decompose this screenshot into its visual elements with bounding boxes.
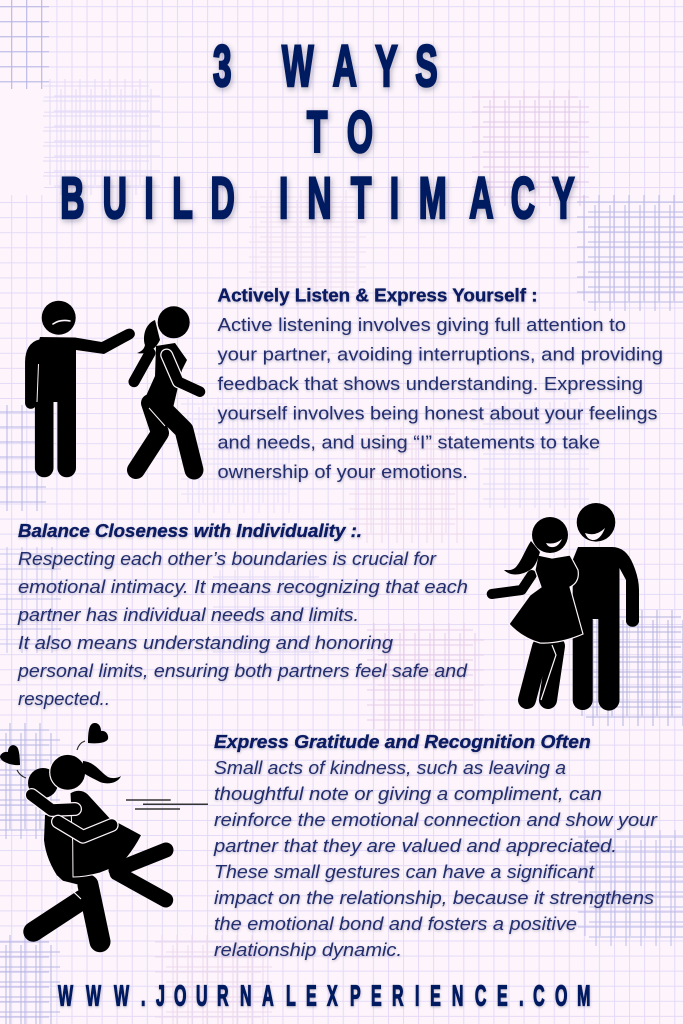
icon: left heart	[0, 745, 20, 765]
text block: balance closeness: emotional intimacy. It means recognizing that each	[18, 576, 468, 597]
footer url: WWW.JOURNALEXPERIENCE.COM	[58, 980, 590, 1012]
text block: actively listen: your partner, avoiding interruptions, and providing	[218, 344, 663, 364]
text block: balance closeness: Balance Closeness with Individuality :.	[18, 520, 362, 541]
title: TO	[307, 101, 373, 165]
text block: express gratitude: partner that they are valued and appreciated.	[213, 835, 617, 856]
text block: actively listen: feedback that shows understanding. Expressing	[218, 373, 643, 394]
text block: express gratitude: Express Gratitude and Recognition Often	[214, 731, 591, 752]
text block: balance closeness: respected..	[18, 688, 110, 709]
text block: express gratitude: reinforce the emotional connection and show your	[214, 809, 658, 830]
text block: balance closeness: partner has individual needs and limits.	[17, 604, 359, 625]
title: 3WAYS	[213, 35, 438, 99]
text block: balance closeness: Respecting each other’s boundaries is crucial for	[18, 548, 437, 569]
text block: express gratitude: the emotional bond and fosters a positive	[214, 913, 577, 934]
title: BUILDINTIMACY	[60, 167, 575, 231]
text block: express gratitude: These small gestures can have a significant	[214, 861, 595, 882]
text block: express gratitude: Small acts of kindness, such as leaving a	[214, 757, 566, 778]
text block: express gratitude: thoughtful note or giving a compliment, can	[214, 783, 602, 804]
icon: smiling couple embracing	[492, 503, 639, 711]
title	[60, 35, 575, 231]
text block: actively listen: yourself involves being honest about your feelings	[218, 402, 658, 423]
text block: express gratitude: relationship dynamic.	[214, 939, 402, 960]
text block: balance closeness: personal limits, ensuring both partners feel safe and	[17, 660, 468, 681]
text block: express gratitude	[213, 731, 658, 960]
icon: right heart	[88, 723, 108, 743]
icon: man reaching toward walking woman	[31, 301, 200, 470]
text block: actively listen: Actively Listen & Express Yourself :	[218, 284, 538, 306]
text block: balance closeness	[17, 520, 468, 709]
text block: actively listen: ownership of your emotions.	[218, 461, 468, 482]
icon: couple jumping into a hug with hearts	[0, 723, 166, 942]
text block: actively listen: and needs, and using “I” statements to take	[218, 432, 600, 453]
text block: actively listen	[218, 284, 663, 482]
text block: actively listen: Active listening involves giving full attention to	[218, 314, 626, 335]
text block: express gratitude: impact on the relationship, because it strengthens	[214, 887, 654, 908]
icon: speed lines	[126, 800, 208, 809]
text block: balance closeness: It also means understanding and honoring	[18, 632, 394, 653]
